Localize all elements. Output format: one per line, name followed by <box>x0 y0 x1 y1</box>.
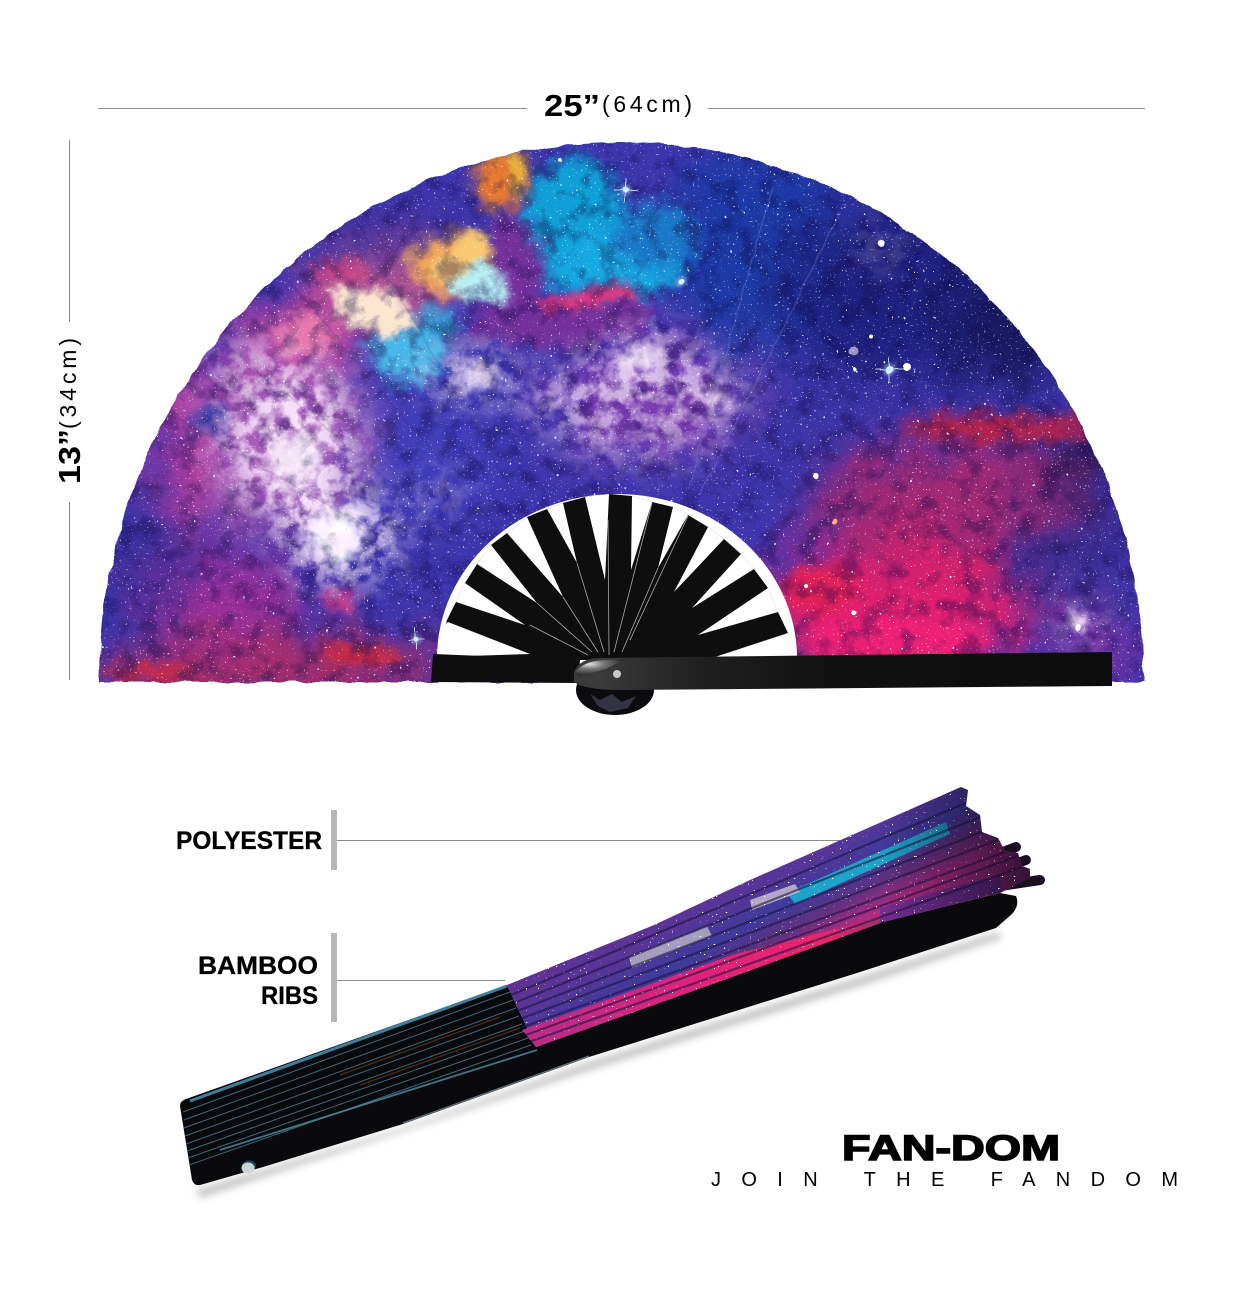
closed fan <box>180 780 1060 1198</box>
folded fabric with galaxy print <box>507 787 1030 1047</box>
hub disc <box>576 665 654 715</box>
brand: FAN-DOM logo: FAN-DOM <box>842 1129 1060 1168</box>
label: bamboo ribs: RIBS <box>261 982 318 1010</box>
upper guard stick, right <box>574 652 1112 690</box>
height dimension: 13 in (34 cm): (34cm) <box>55 338 81 429</box>
label: bamboo ribs <box>198 933 505 1022</box>
soft shadow under closed fan <box>196 932 1002 1198</box>
label: bamboo ribs: BAMBOO <box>198 952 318 980</box>
width dimension: 25 in (64 cm): (64cm) <box>602 91 692 117</box>
infographic canvas <box>58 94 1176 1200</box>
lower guard stick, left <box>431 654 580 683</box>
black guard and handle <box>180 893 1017 1185</box>
label: polyester <box>176 810 850 870</box>
open galaxy fan <box>85 130 1150 715</box>
label: polyester: POLYESTER <box>176 827 322 855</box>
width dimension: 25 in (64 cm): 25” <box>544 88 600 123</box>
white opening behind the ribs <box>437 494 797 664</box>
height dimension: 13 in (34 cm): 13” <box>52 429 87 484</box>
fan fabric: galaxy print <box>85 130 1150 690</box>
bamboo ribs <box>437 494 797 660</box>
brand tagline: JOIN THE FANDOM <box>711 1169 1178 1191</box>
protruding rib tips <box>1000 847 1040 886</box>
width dimension: 25 in (64 cm) <box>98 88 1145 123</box>
height dimension: 13 in (34 cm) <box>52 140 87 680</box>
hub highlight and rivet <box>574 659 626 678</box>
bright stars <box>408 158 1081 650</box>
rivet <box>242 1160 256 1174</box>
